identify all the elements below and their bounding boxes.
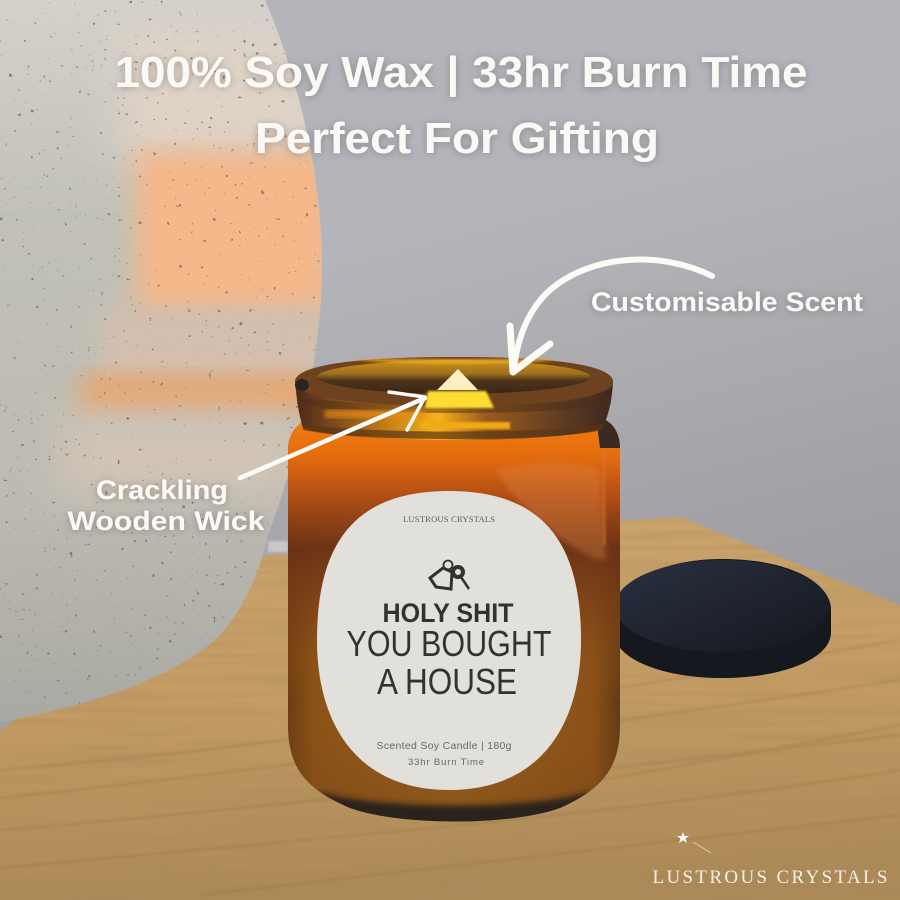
wooden table [0, 517, 900, 900]
arrow to wick [240, 392, 425, 478]
label brand: LUSTROUS CRYSTALS [403, 514, 495, 524]
brand logo [652, 832, 888, 888]
icon: house and keys [430, 560, 469, 589]
amber candle jar [288, 357, 620, 830]
small white object behind vase [268, 541, 288, 552]
black lid [614, 559, 831, 678]
callout: crackling wooden wick: Crackling [96, 475, 228, 505]
headline: Perfect For Gifting [255, 114, 659, 163]
label burn time: 33hr Burn Time [408, 757, 484, 768]
jar body [288, 415, 620, 830]
callout: crackling wooden wick [68, 475, 266, 536]
round label [317, 491, 581, 790]
headline [114, 48, 808, 163]
speckled ceramic vase [0, 0, 335, 730]
label details: Scented Soy Candle | 180g [376, 740, 512, 752]
label title line 2: YOU BOUGHT [346, 623, 552, 664]
callout: customisable scent: Customisable Scent [591, 287, 863, 317]
label title bold: HOLY SHIT [382, 598, 514, 628]
headline: 100% Soy Wax | 33hr Burn Time [114, 48, 808, 98]
lamp glow on vase [60, 30, 335, 495]
icon: star [677, 832, 689, 843]
brand logo: LUSTROUS CRYSTALS [652, 867, 888, 888]
flame [425, 369, 494, 408]
callout: crackling wooden wick: Wooden Wick [68, 506, 266, 536]
label title line 3: A HOUSE [377, 661, 517, 702]
glass rim [295, 357, 613, 440]
arrow to scent [510, 260, 712, 372]
